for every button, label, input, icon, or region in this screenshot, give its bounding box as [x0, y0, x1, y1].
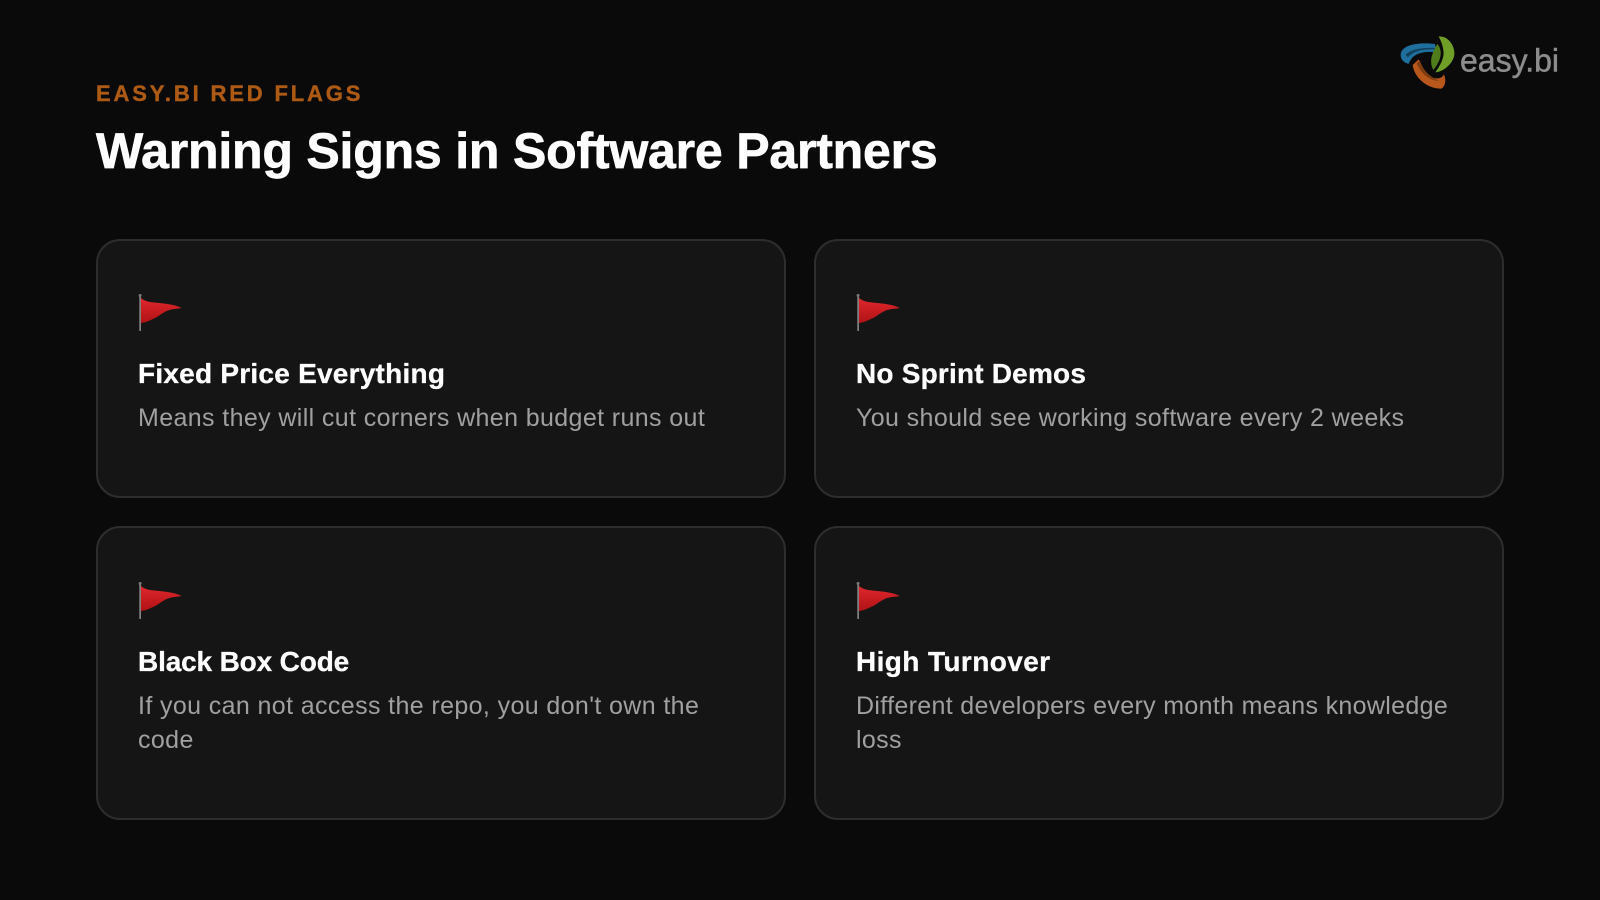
icon: red flag [856, 582, 900, 619]
icon: red flag [138, 582, 182, 619]
eyebrow label: EASY.BI RED FLAGS [96, 81, 363, 106]
card heading: No Sprint Demos [856, 358, 1086, 389]
icon: red flag [856, 294, 900, 331]
logo [1400, 36, 1559, 89]
card text: Means they will cut corners when budget runs out [138, 404, 705, 432]
card heading: Black Box Code [138, 646, 349, 677]
card text: Different developers every month means knowledge [856, 692, 1448, 720]
icon: logo mark [1401, 37, 1454, 89]
title: Warning Signs in Software Partners [96, 123, 938, 179]
panel: Fixed Price Everything [96, 239, 786, 498]
card text [138, 692, 699, 754]
card heading: High Turnover [856, 646, 1050, 677]
logo wordmark: easy.bi [1460, 42, 1559, 78]
card text [856, 692, 1448, 754]
card heading: Fixed Price Everything [138, 358, 445, 389]
panel: High Turnover [814, 526, 1504, 820]
panel: No Sprint Demos [814, 239, 1504, 498]
panel: Black Box Code [96, 526, 786, 820]
card text: code [138, 726, 194, 754]
card text: loss [856, 726, 902, 754]
card text: You should see working software every 2 weeks [856, 404, 1404, 432]
card text: If you can not access the repo, you don't own the [138, 692, 699, 720]
icon: red flag [138, 294, 182, 331]
